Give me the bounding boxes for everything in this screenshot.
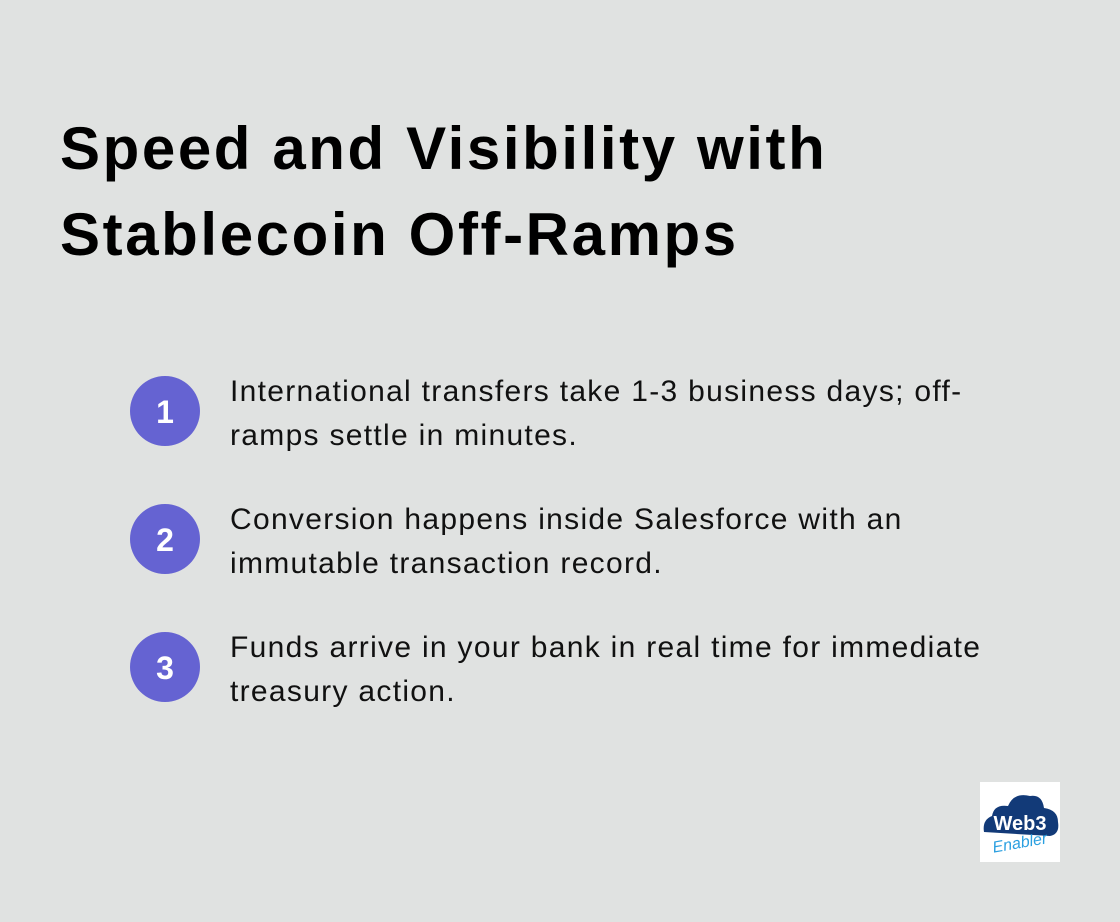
text 3: Funds arrive in your bank in real time for immediate bbox=[230, 631, 981, 664]
text 1 bbox=[230, 375, 962, 452]
icon: number 2 bbox=[130, 504, 200, 574]
text 3: treasury action. bbox=[230, 675, 456, 708]
text 3 bbox=[230, 631, 981, 708]
logo bbox=[980, 782, 1060, 862]
icon: number 3: 3 bbox=[156, 650, 174, 686]
title bbox=[60, 115, 827, 268]
text 1: International transfers take 1-3 business days; off- bbox=[230, 375, 962, 408]
text 1: ramps settle in minutes. bbox=[230, 419, 578, 452]
icon: number 1 bbox=[130, 376, 200, 446]
text 2 bbox=[230, 503, 903, 580]
text 2: immutable transaction record. bbox=[230, 547, 663, 580]
icon: number 3 bbox=[130, 632, 200, 702]
logo: Web3 bbox=[994, 813, 1046, 835]
icon: number 1: 1 bbox=[156, 394, 174, 430]
title: Stablecoin Off-Ramps bbox=[60, 201, 739, 268]
text 2: Conversion happens inside Salesforce with an bbox=[230, 503, 903, 536]
item 1 bbox=[130, 375, 962, 452]
item 3 bbox=[130, 631, 981, 708]
logo: Enabler bbox=[991, 830, 1049, 857]
icon: number 2: 2 bbox=[156, 522, 174, 558]
item 2 bbox=[130, 503, 903, 580]
title: Speed and Visibility with bbox=[60, 115, 827, 182]
